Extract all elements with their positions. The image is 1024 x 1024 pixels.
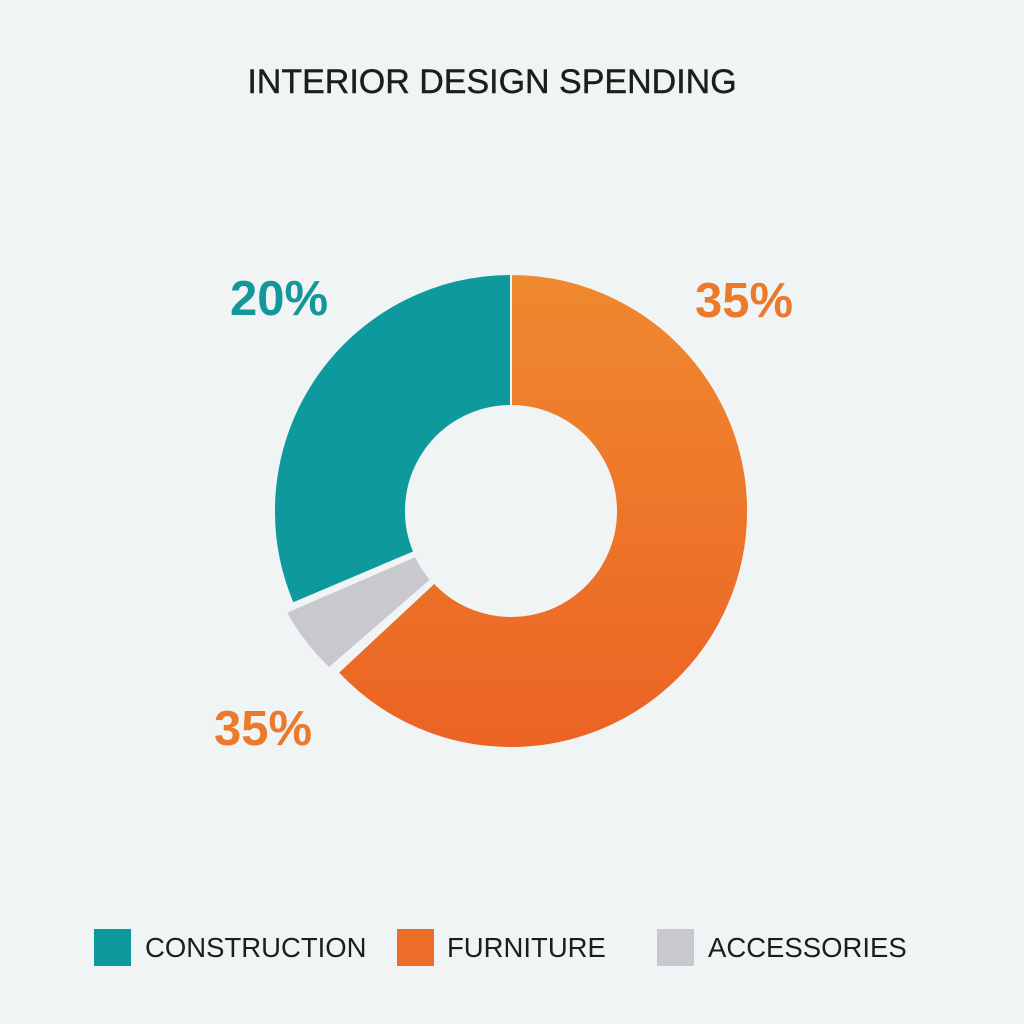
label: accessories 35%: 35%	[214, 702, 312, 756]
legend: furniture	[397, 929, 606, 966]
legend: construction	[94, 929, 367, 966]
legend	[94, 929, 907, 966]
title: INTERIOR DESIGN SPENDING	[247, 63, 737, 101]
segment: accessories	[285, 555, 432, 669]
label: construction 20%: 20%	[230, 272, 328, 326]
label: furniture 35%: 35%	[695, 274, 793, 328]
legend: FURNITURE	[447, 932, 606, 963]
segment: furniture	[338, 274, 748, 748]
segment: construction	[274, 274, 511, 604]
legend: CONSTRUCTION	[145, 932, 367, 963]
legend: accessories	[657, 929, 907, 966]
legend: ACCESSORIES	[708, 932, 907, 963]
